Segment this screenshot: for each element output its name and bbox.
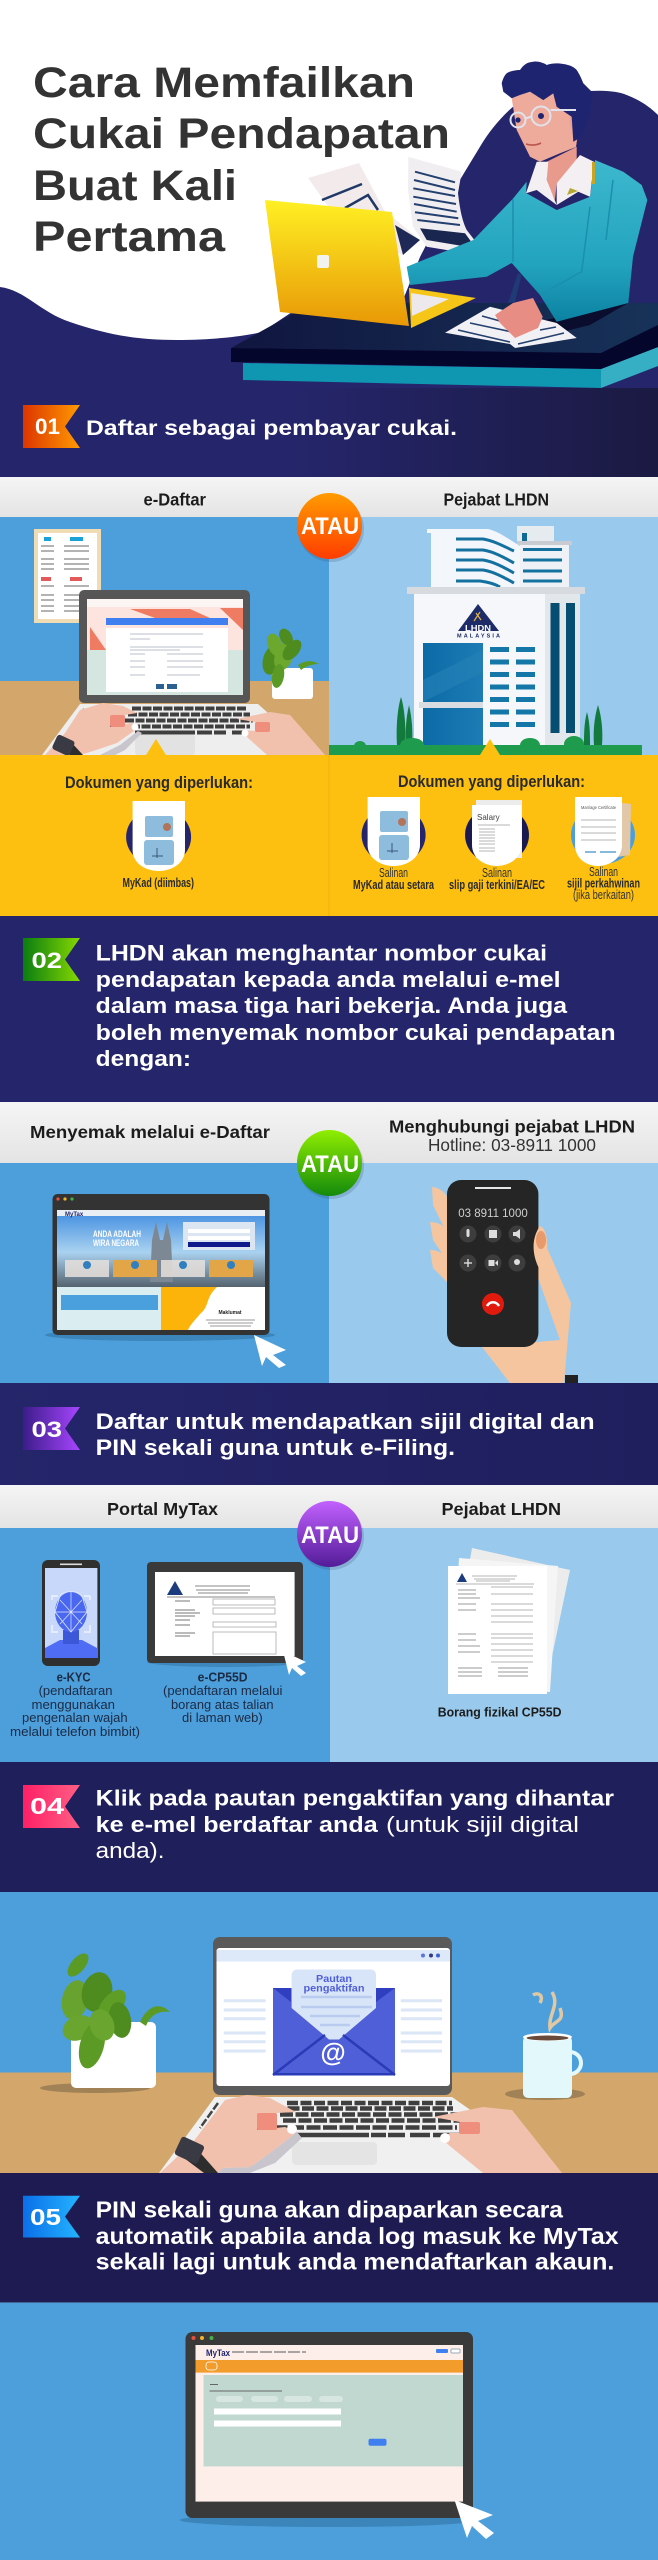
certificate label [567, 865, 640, 902]
icon: salary slip: Salary [477, 813, 500, 822]
step 01 text: Daftar sebagai pembayar cukai. [86, 416, 457, 440]
laptop screen with envelope [213, 1937, 452, 2095]
tablet with MyTax website [45, 1194, 275, 1341]
header strip: Menyemak melalui e-Daftar [30, 1122, 270, 1142]
hand [480, 1225, 571, 1383]
envelope: Pautan [316, 1974, 352, 1985]
e-KYC caption: e-KYC [57, 1670, 91, 1684]
laptop keyboard base [42, 704, 315, 755]
icon: MyKad copy [362, 797, 426, 866]
tablet with MyTax website: Maklumat [218, 1310, 242, 1316]
icon: paper form CP55D [448, 1548, 570, 1694]
badge 02 [23, 938, 80, 981]
right documents heading: Dokumen yang diperlukan: [398, 772, 585, 791]
header strip [0, 477, 658, 517]
step 02 text [96, 940, 616, 1071]
e-KYC caption [10, 1670, 140, 1739]
step 03 band [0, 1383, 658, 1485]
cursor arrow [454, 2500, 494, 2539]
step 03 text [96, 1409, 595, 1460]
laptop screen [79, 590, 250, 703]
panel: step 02 options [0, 1102, 658, 1383]
MyKad copy label: MyKad atau setara [353, 878, 435, 892]
step 04 text: (untuk sijil digital [386, 1812, 579, 1837]
hero illustration panel [0, 62, 658, 400]
panel: step 03 options [0, 1485, 658, 1762]
step 04 band [0, 1762, 658, 1892]
navy blob behind man [403, 91, 658, 310]
badge 05 [23, 2196, 80, 2238]
LHDN logo [457, 604, 500, 640]
cursor arrow [283, 1651, 306, 1676]
header strip: Menghubungi pejabat LHDN [389, 1116, 635, 1136]
keyboard base [159, 2097, 560, 2173]
step 03 text: Daftar untuk mendapatkan sijil digital dan [96, 1409, 595, 1434]
right light panel [330, 1528, 658, 1762]
sweater creases [513, 180, 613, 295]
step 02 text: pendapatan kepada anda melalui e-mel [96, 967, 561, 992]
laptop with MyTax page [180, 2332, 480, 2527]
MyKad label: MyKad (diimbas) [122, 876, 194, 890]
header strip: Hotline: 03-8911 1000 [428, 1135, 596, 1155]
typing hands [160, 2095, 562, 2173]
step 04 text [96, 1786, 614, 1863]
left e-Daftar scene [0, 517, 329, 756]
ATAU purple circle [297, 1501, 364, 1570]
e-CP55D caption: borang atas talian [171, 1698, 274, 1712]
icon: e-CP55D tablet [147, 1562, 303, 1667]
certificate label: (jika berkaitan) [573, 888, 634, 902]
smartphone with hand: 03 8911 1000 [458, 1208, 528, 1220]
step 05 text: sekali lagi untuk anda mendaftarkan akaun. [96, 2249, 614, 2275]
navy wave background [0, 287, 658, 400]
LHDN logo: LHDN [465, 624, 491, 633]
icon: salary slip [465, 800, 529, 866]
glasses [510, 106, 576, 128]
step 02 band [0, 916, 658, 1102]
badge 04: 04 [30, 1793, 64, 1819]
right light panel [329, 1163, 658, 1383]
header strip: e-Daftar [144, 490, 206, 510]
badge 01: 01 [35, 414, 60, 439]
header strip [0, 1102, 658, 1163]
trees and lawn [329, 697, 642, 755]
panel: MyTax PIN screen [0, 2303, 658, 2560]
icon: marriage certificate: Marriage Certificate [581, 805, 616, 810]
left documents heading: Dokumen yang diperlukan: [65, 773, 253, 792]
badge 01 [23, 405, 80, 448]
ATAU green circle [297, 1130, 364, 1199]
laptop with MyTax page: MyTax [206, 2348, 230, 2358]
title: Pertama [33, 213, 226, 261]
salary slip label: slip gaji terkini/EA/EC [449, 878, 545, 892]
badge 02: 02 [32, 948, 62, 973]
wrist watch [51, 734, 83, 756]
cursor arrow [254, 1335, 286, 1368]
step 04 text: ke e-mel berdaftar anda [96, 1812, 378, 1837]
ATAU green circle: ATAU [301, 1151, 359, 1178]
e-KYC caption: melalui telefon bimbit) [10, 1725, 140, 1739]
step 02 text: dalam masa tiga hari bekerja. Anda juga [96, 993, 568, 1018]
title: Cara Memfailkan [33, 59, 415, 107]
required documents panel [0, 755, 658, 916]
step 05 text [96, 2197, 619, 2275]
badge 05: 05 [30, 2204, 61, 2230]
sweater [407, 160, 647, 322]
header strip: Pejabat LHDN [444, 490, 549, 510]
building [407, 526, 585, 745]
step 05 band [0, 2173, 658, 2303]
potted plant [40, 1950, 170, 2093]
header strip: Portal MyTax [107, 1499, 218, 1519]
icon: MyKad scanned [126, 801, 191, 871]
panel: step 01 options [0, 477, 658, 916]
tablet with MyTax website: ANDA ADALAH [93, 1229, 141, 1239]
MyKad copy label [353, 866, 435, 892]
left blue panel [0, 1528, 330, 1762]
right LHDN building scene [329, 517, 658, 755]
badge 03: 03 [32, 1417, 62, 1442]
form caption: Borang fizikal CP55D [438, 1704, 562, 1720]
envelope [273, 1970, 395, 2076]
wrist watch [174, 2136, 218, 2173]
step 02 text: dengan: [96, 1046, 191, 1071]
header strip: Pejabat LHDN [442, 1499, 561, 1519]
title: Buat Kali [33, 162, 237, 210]
envelope: @ [320, 2037, 346, 2067]
ATAU orange circle: ATAU [301, 513, 359, 540]
man [407, 62, 647, 322]
LHDN logo: MALAYSIA [457, 634, 500, 640]
certificate label: Salinan [589, 865, 618, 879]
typing hands [45, 703, 325, 755]
salary slip label: Salinan [482, 866, 512, 880]
desk [231, 303, 658, 388]
neck [547, 147, 577, 200]
e-KYC caption: pengenalan wajah [22, 1711, 128, 1725]
potted plant [259, 626, 319, 699]
ear [570, 111, 582, 131]
papers in hand [308, 157, 487, 257]
step 04 text: Klik pada pautan pengaktifan yang dihantar [96, 1786, 614, 1810]
icon: e-KYC phone [42, 1560, 100, 1666]
envelope: pengaktifan [304, 1984, 365, 1994]
panel: email activation scene [0, 1892, 658, 2173]
e-KYC caption: (pendaftaran [39, 1684, 113, 1698]
step 02 text: boleh menyemak nombor cukai pendapatan [96, 1020, 616, 1045]
yellow laptop [265, 200, 476, 328]
coffee mug [505, 1992, 585, 2100]
step 01 band [0, 388, 658, 477]
step 04 text: anda). [96, 1838, 164, 1863]
tablet with MyTax website: MyTax [65, 1212, 84, 1218]
ATAU purple circle: ATAU [301, 1522, 359, 1549]
MyKad copy label: Salinan [379, 866, 408, 880]
badge 04 [23, 1785, 80, 1828]
e-KYC caption: menggunakan [32, 1698, 115, 1712]
smartphone with hand [430, 1180, 578, 1383]
step 02 text: LHDN akan menghantar nombor cukai [96, 940, 547, 966]
pointer notch [480, 739, 500, 755]
title: Cukai Pendapatan [33, 110, 450, 158]
tablet with MyTax website: WIRA NEGARA [93, 1238, 139, 1248]
ATAU orange circle [297, 493, 364, 562]
badge 03 [23, 1407, 80, 1450]
collar [526, 155, 594, 205]
e-CP55D caption: (pendaftaran melalui [163, 1684, 282, 1698]
left blue panel [0, 1163, 329, 1383]
wall poster [34, 529, 101, 623]
step 05 text: PIN sekali guna akan dipaparkan secara [96, 2197, 563, 2223]
pointer notch [146, 739, 166, 755]
thumb [534, 1226, 547, 1270]
e-CP55D caption [163, 1670, 282, 1725]
title [33, 59, 450, 261]
hand-drawn paper and pen [445, 273, 577, 348]
steam [533, 1992, 561, 2028]
salary slip label [449, 866, 545, 892]
icon: marriage certificate [571, 797, 635, 866]
e-CP55D caption: di laman web) [182, 1711, 263, 1725]
hair [502, 62, 593, 142]
e-CP55D caption: e-CP55D [198, 1670, 248, 1684]
step 05 text: automatik apabila anda log masuk ke MyTax [96, 2223, 619, 2249]
header strip [0, 1485, 658, 1528]
face [512, 92, 580, 162]
step 03 text: PIN sekali guna untuk e-Filing. [96, 1435, 455, 1460]
